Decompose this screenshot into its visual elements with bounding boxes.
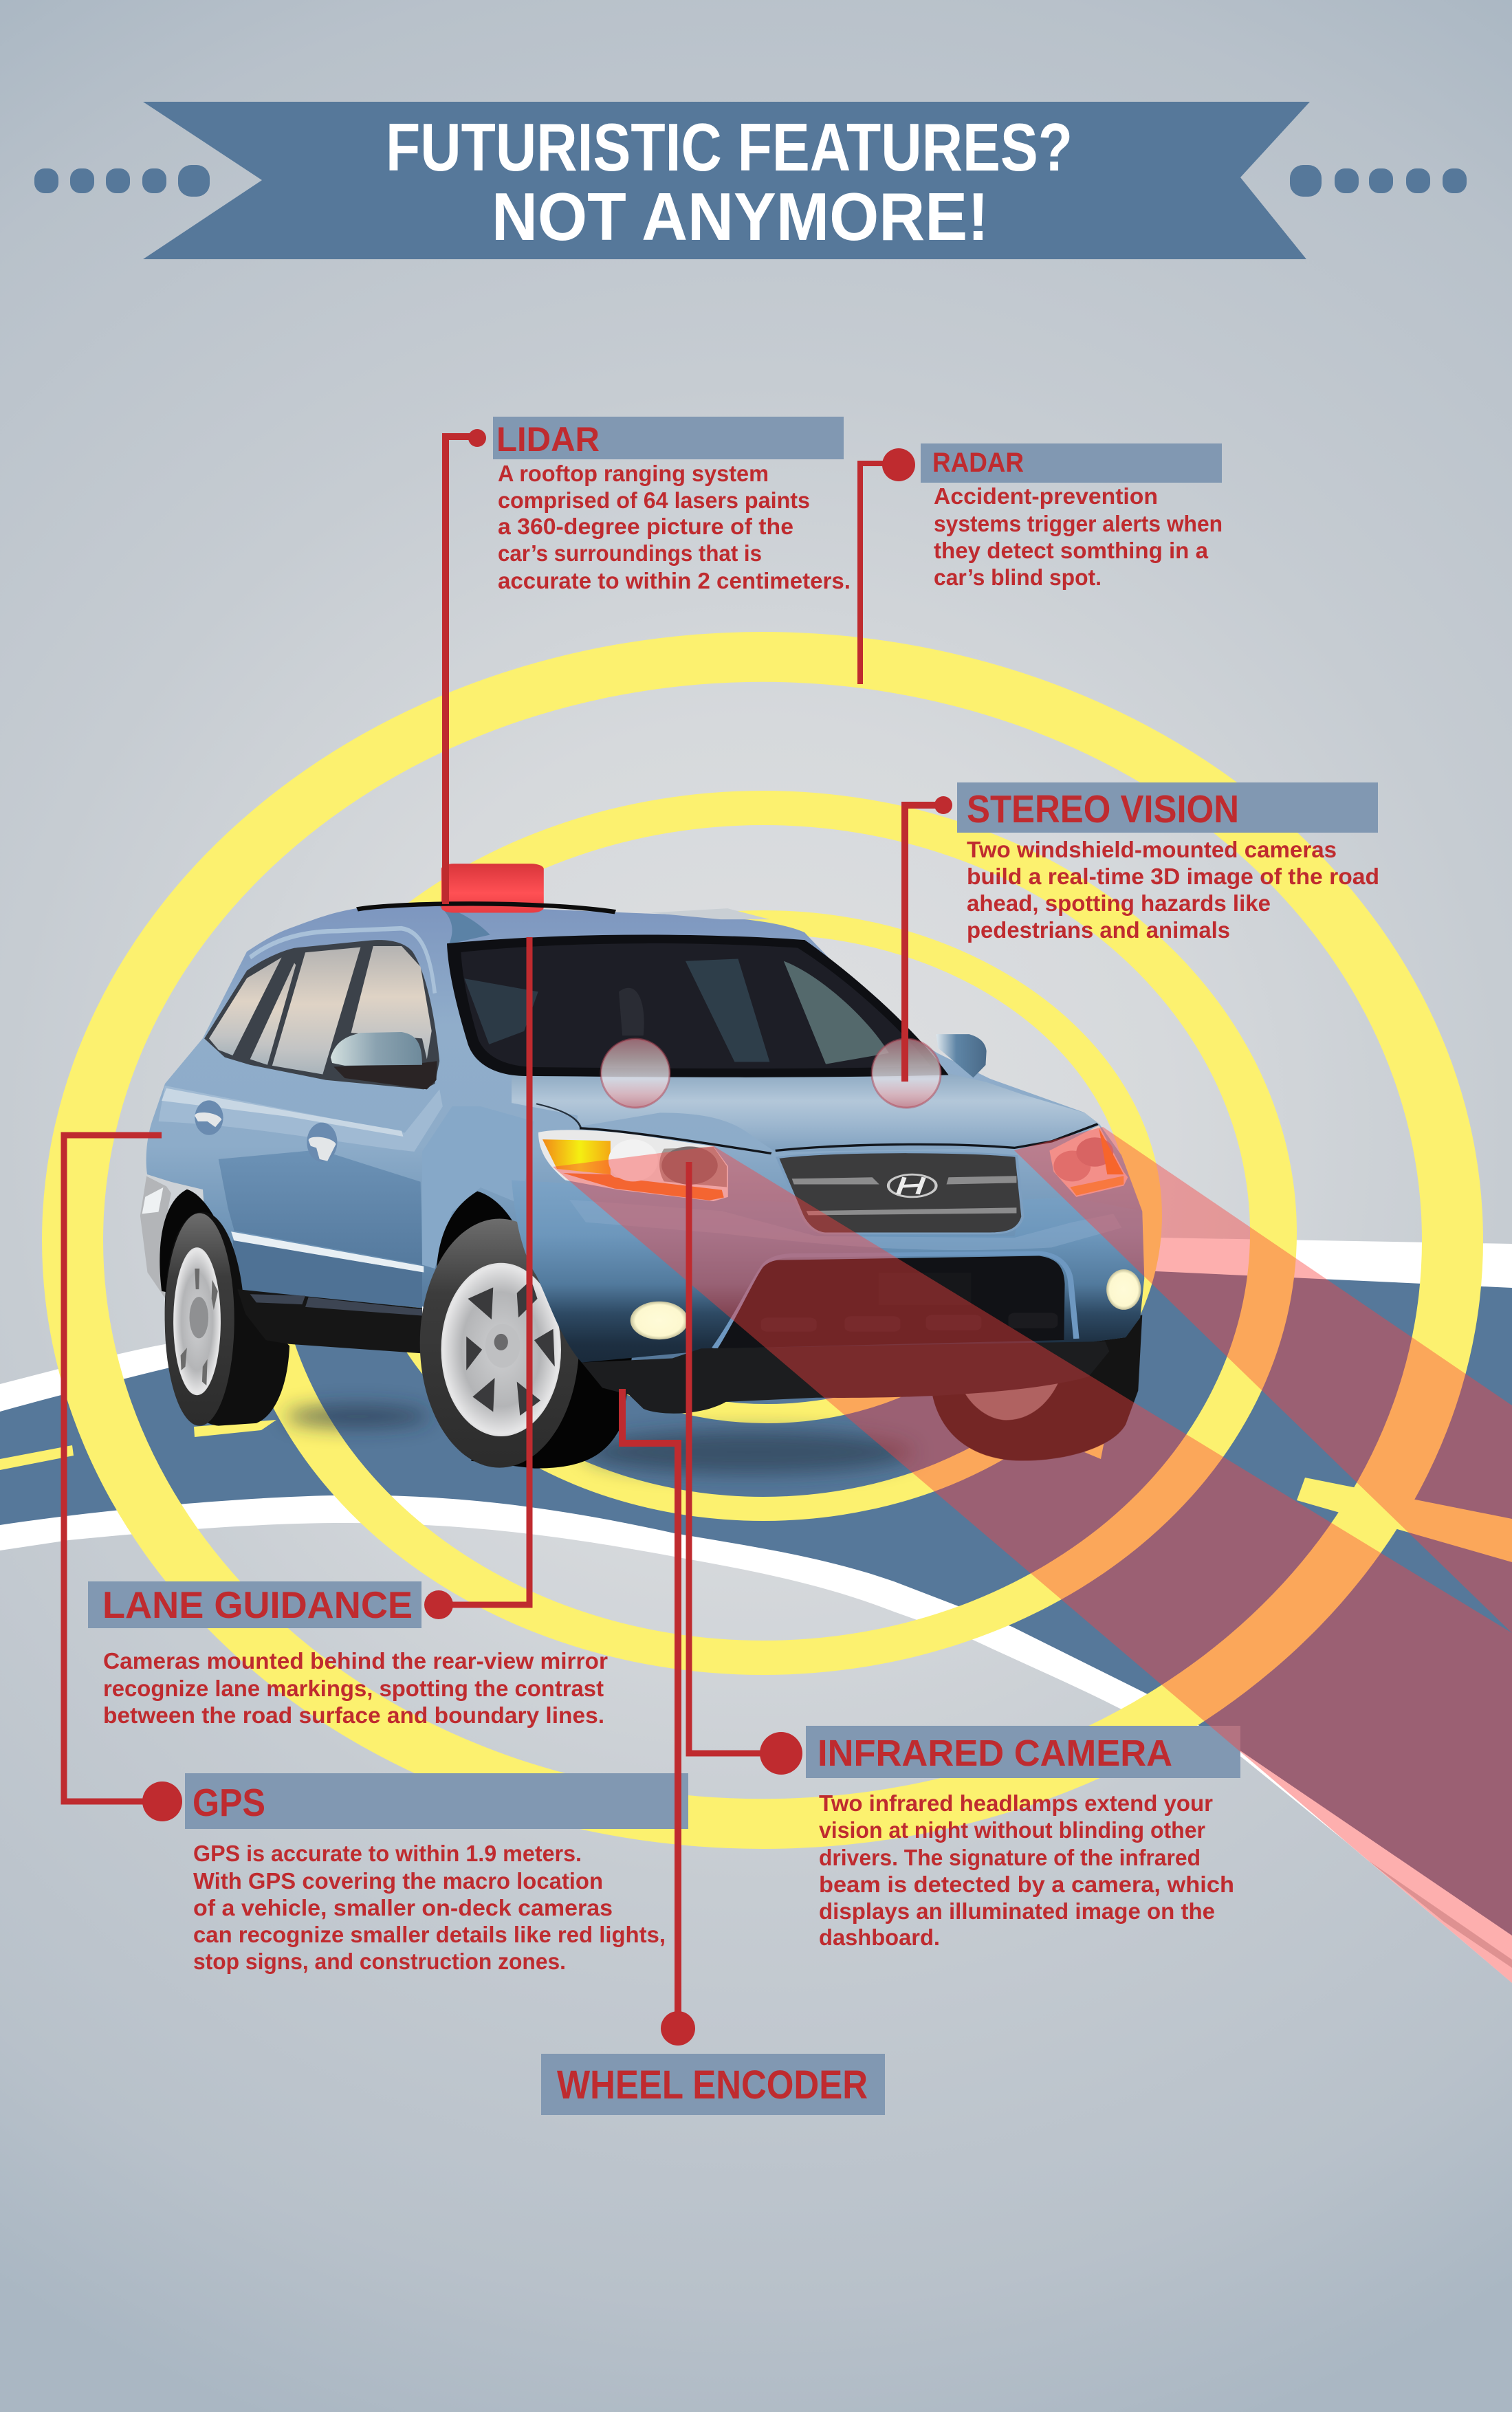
infrared text: displays an illuminated image on the: [819, 1898, 1215, 1924]
banner dots right: [1290, 165, 1467, 197]
gps text: GPS is accurate to within 1.9 meters.: [193, 1841, 582, 1866]
car front: [512, 1034, 1144, 1414]
ring inner: [492, 1011, 1042, 1423]
infrared connector: [689, 1162, 802, 1775]
gps connector: [64, 1135, 182, 1821]
road centre line: [0, 1420, 1512, 1562]
radar connector: [860, 448, 915, 684]
front door handle: [307, 1123, 337, 1162]
banner dots left: [34, 165, 210, 197]
stereo text: build a real-time 3D image of the road: [967, 864, 1379, 889]
lidar heading: LIDAR: [496, 420, 600, 459]
lane text: recognize lane markings, spotting the contrast: [103, 1676, 604, 1701]
gps text: With GPS covering the macro location: [193, 1868, 603, 1894]
gps heading: [185, 1773, 688, 1829]
grille slats: [761, 1273, 1058, 1332]
rear wheel back tyre: [165, 1212, 289, 1426]
car side details: [140, 906, 635, 1469]
road: [0, 1237, 1512, 1983]
fender hood line: [536, 1104, 581, 1128]
wheel encoder heading: [541, 2054, 885, 2115]
rear bumper: [140, 1176, 171, 1299]
ring third: [364, 910, 1162, 1521]
callout: wheel encoder: [541, 1389, 885, 2115]
infrared text: vision at night without blinding other: [819, 1817, 1205, 1843]
rear bumper white trim: [142, 1187, 163, 1214]
lane text: [103, 1648, 608, 1728]
lidar unit: [441, 864, 544, 913]
wheel encoder connector: [622, 1389, 695, 2046]
infrared text: dashboard.: [819, 1925, 940, 1950]
roof rack: [650, 908, 769, 919]
door upper sheen: [159, 1086, 443, 1152]
gps text: can recognize smaller details like red lights,: [193, 1922, 666, 1947]
road white edge lines: [0, 1237, 1512, 1983]
stereo text: pedestrians and animals: [967, 917, 1230, 943]
front fascia: [512, 1180, 1144, 1363]
gps text: stop signs, and construction zones.: [193, 1949, 566, 1974]
lidar text: a 360-degree picture of the: [498, 514, 793, 539]
radar heading: RADAR: [932, 448, 1024, 478]
title banner: [143, 102, 1310, 259]
rear wheel well: [160, 1189, 225, 1302]
stereo connector: [905, 796, 952, 1082]
door bright line: [162, 1088, 403, 1137]
stereo text: ahead, spotting hazards like: [967, 890, 1271, 916]
beam left headlight: [553, 1146, 1512, 1983]
lidar text: [498, 461, 851, 593]
lower bumper: [582, 1341, 1109, 1414]
gps text: of a vehicle, smaller on-deck cameras: [193, 1895, 613, 1920]
bumper sheen: [569, 1200, 1121, 1250]
callout: gps: [64, 1135, 688, 1974]
lower grille: [718, 1256, 1065, 1348]
door crease highlight: [231, 1231, 424, 1272]
radar rings: [42, 632, 1483, 1849]
radar text: [934, 483, 1223, 590]
hood edge line: [580, 1124, 1098, 1154]
lidar connector: [446, 429, 486, 904]
rear door handle: [195, 1100, 223, 1135]
ring second: [230, 791, 1297, 1675]
a-pillar shade: [439, 906, 490, 944]
lane text: between the road surface and boundary lines.: [103, 1702, 604, 1728]
side window frame: [204, 940, 439, 1089]
stereo heading: STEREO VISION: [967, 787, 1239, 831]
lower door panel: [219, 1150, 422, 1264]
rear wheel hub: [173, 1247, 221, 1395]
radar text: they detect somthing in a: [934, 538, 1209, 563]
car shadows: [285, 1405, 914, 1474]
label: infrared camera box: [806, 1726, 1240, 1778]
front wheel arch: [437, 1192, 522, 1314]
white line shade: [1368, 1861, 1512, 1968]
radar text: systems trigger alerts when: [934, 511, 1223, 536]
title text: NOT ANYMORE!: [492, 179, 989, 254]
right headlight: [1049, 1126, 1128, 1197]
callout: radar: [860, 443, 1223, 684]
lane text: Cameras mounted behind the rear-view mirror: [103, 1648, 608, 1674]
car body: [146, 905, 1144, 1360]
lidar text: comprised of 64 lasers paints: [498, 487, 810, 513]
callout: stereo vision: [905, 782, 1379, 1082]
wheel encoder heading: WHEEL ENCODER: [557, 2063, 868, 2107]
lidar text: A rooftop ranging system: [498, 461, 769, 486]
front tyre: [420, 1219, 579, 1468]
side mirror: [331, 1032, 437, 1089]
ring outer: [42, 632, 1483, 1849]
right fog light: [1106, 1269, 1141, 1310]
callout: lidar: [446, 417, 851, 904]
lidar heading: [493, 417, 844, 459]
infrared text: [819, 1790, 1234, 1950]
windshield sensor right: [872, 1039, 941, 1108]
title text: FUTURISTIC FEATURES?: [386, 109, 1073, 185]
stereo text: Two windshield-mounted cameras: [967, 837, 1337, 862]
logo: [888, 1174, 936, 1197]
hood: [512, 1073, 1099, 1152]
callout: lane guidance: [88, 937, 608, 1728]
far side mirror: [936, 1034, 987, 1077]
infrared text: beam is detected by a camera, which: [819, 1872, 1234, 1897]
lane heading: LANE GUIDANCE: [102, 1583, 413, 1626]
radar heading: [921, 443, 1222, 483]
gps heading: GPS: [193, 1781, 265, 1825]
front fender sheen: [422, 1106, 534, 1269]
infrared text: Two infrared headlamps extend your: [819, 1790, 1213, 1816]
side step: [237, 1289, 422, 1353]
roof highlight: [250, 928, 435, 994]
beam right headlight: [1014, 1127, 1512, 1633]
title text: [386, 109, 1073, 254]
road surface: [0, 1271, 1512, 1936]
radar text: Accident-prevention: [934, 483, 1158, 509]
infrared text: drivers. The signature of the infrared: [819, 1845, 1201, 1870]
lidar text: car’s surroundings that is: [498, 540, 762, 566]
far front wheel: [932, 1315, 1142, 1461]
front tyre black side: [471, 1314, 635, 1469]
windshield sensor left: [601, 1039, 670, 1108]
callout: infrared camera: [689, 1162, 1234, 1950]
gps text: [193, 1841, 666, 1974]
grille: [778, 1152, 1022, 1234]
car roof and windshield: [357, 864, 949, 1077]
infrared beams: [553, 1127, 1512, 1983]
front wheel hub: [441, 1263, 561, 1436]
lane connector: [424, 937, 529, 1619]
stereo text: [967, 837, 1379, 943]
left fog light: [631, 1302, 688, 1339]
rear wheel tyre face: [165, 1213, 234, 1426]
side window panes: [209, 946, 432, 1074]
bumper opening trim: [714, 1253, 1076, 1348]
stereo heading: [957, 782, 1378, 833]
roof rail: [357, 903, 615, 912]
left headlight: [538, 1130, 728, 1201]
radar text: car’s blind spot.: [934, 564, 1102, 590]
infrared heading: INFRARED CAMERA: [818, 1733, 1172, 1774]
windshield: [447, 935, 949, 1077]
rocker panel: [232, 1240, 422, 1308]
lidar text: accurate to within 2 centimeters.: [498, 568, 851, 593]
